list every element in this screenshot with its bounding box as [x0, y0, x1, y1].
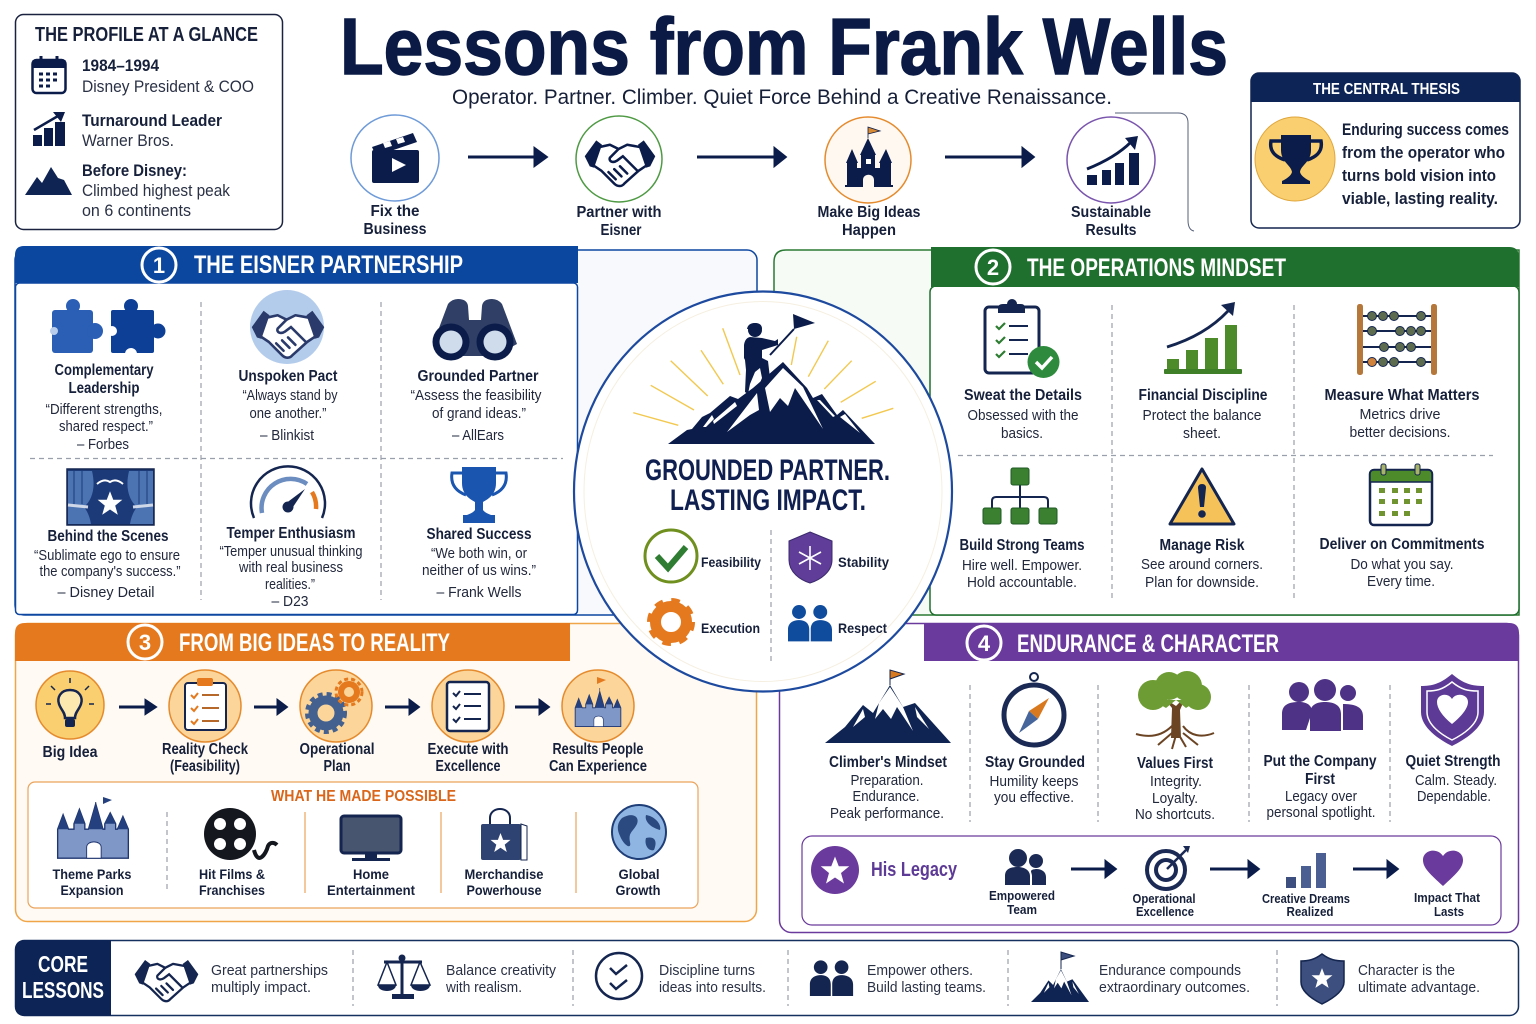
item: temper enthusiasm: with real business: [238, 560, 343, 576]
step: operational excellence: Operational: [1132, 892, 1196, 906]
value: stability: [789, 532, 889, 583]
item: put the company first: [1264, 679, 1377, 821]
item: behind the scenes: the company's success.”: [40, 564, 181, 580]
item: shared success: neither of us wins.”: [422, 563, 536, 579]
item: values first: Values First: [1137, 755, 1213, 772]
icon: film clapper: [351, 115, 439, 201]
panel 2: the operations mindset: [774, 247, 1519, 615]
item: manage risk: See around corners.: [1141, 557, 1263, 573]
item: sweat the details: Sweat the Details: [964, 387, 1082, 404]
item: manage risk: Manage Risk: [1160, 537, 1245, 554]
lesson: discipline: ideas into results.: [659, 979, 766, 996]
item: unspoken pact: – Blinkist: [260, 428, 314, 444]
heading: panel 4: ENDURANCE & CHARACTER: [1017, 630, 1279, 658]
lesson: partnerships: [135, 960, 328, 1001]
lesson: empower: Build lasting teams.: [867, 979, 986, 996]
lesson: character: Character is the: [1358, 962, 1455, 979]
icon: stage curtains: [67, 469, 154, 525]
item: complementary leadership: – Forbes: [77, 437, 129, 453]
step: big idea: Big Idea: [42, 744, 98, 761]
item: quiet strength: Dependable.: [1417, 789, 1491, 805]
text: turnaround: Turnaround Leader: [82, 111, 222, 130]
item: merchandise: Powerhouse: [466, 882, 542, 898]
item: home entertainment: Entertainment: [327, 882, 415, 898]
item: financial discipline: [1138, 387, 1268, 442]
value: respect: [788, 605, 887, 641]
icon: gauge: [251, 466, 325, 518]
lesson: endurance: Endurance compounds: [1099, 962, 1241, 979]
item: complementary leadership: “Different strengths,: [46, 402, 162, 418]
item: behind the scenes: Behind the Scenes: [48, 528, 168, 545]
lesson: discipline: [596, 953, 766, 999]
heading: profile: THE PROFILE AT A GLANCE: [35, 24, 258, 46]
heading: panel 1: [142, 248, 463, 282]
item: stay grounded: you effective.: [994, 790, 1074, 806]
item: hit films: Hit Films &: [199, 866, 265, 882]
item: values first: No shortcuts.: [1135, 807, 1215, 823]
arrow: [945, 149, 1033, 165]
item: build strong teams: Hold accountable.: [967, 575, 1077, 591]
arrow: [468, 149, 546, 165]
item: shared success: Shared Success: [426, 526, 532, 543]
band: core lessons: [15, 940, 1518, 1016]
step: operational plan: [300, 670, 374, 775]
step: execute with excellence: Execute with: [428, 741, 508, 758]
item: temper enthusiasm: Temper Enthusiasm: [226, 525, 356, 542]
item: measure what matters: Measure What Matters: [1324, 387, 1480, 404]
step: creative dreams realized: [1262, 853, 1350, 919]
text: before disney: Climbed highest peak: [82, 181, 230, 200]
item: unspoken pact: one another.”: [250, 406, 327, 422]
item: grounded partner: of grand ideas.”: [432, 406, 526, 422]
item: home entertainment: Home: [353, 866, 389, 882]
item: home entertainment: [327, 816, 415, 898]
item: merchandise: [464, 809, 544, 898]
panel 1: the Eisner partnership: [15, 246, 757, 615]
flow: four-step path: [351, 113, 1194, 239]
item: put the company first: Put the Company: [1264, 753, 1377, 770]
step: results people can experience: Results People: [552, 741, 644, 758]
text: thesis: from the operator who: [1342, 144, 1505, 162]
text: turnaround: Warner Bros.: [82, 131, 174, 150]
item: build strong teams: [960, 537, 1084, 591]
heading: grounded partner lasting impact: LASTING IMPACT.: [670, 484, 866, 517]
value: respect: Respect: [838, 620, 887, 636]
lesson: balance: Balance creativity: [446, 962, 556, 979]
center medallion: [574, 292, 952, 692]
lesson: endurance: [1031, 952, 1250, 1002]
label: make big ideas happen: [818, 204, 920, 239]
arrow: [515, 701, 548, 713]
item: global growth: Global: [618, 866, 660, 882]
item: measure what matters: Metrics drive: [1360, 407, 1440, 423]
item: theme parks: Theme Parks: [52, 866, 132, 882]
lesson: partnerships: multiply impact.: [211, 979, 311, 996]
item: behind the scenes: – Disney Detail: [58, 585, 154, 601]
icon: trophy: [1255, 117, 1335, 201]
icon: checklist clipboard: [985, 299, 1060, 378]
lesson: discipline: Discipline turns: [659, 962, 755, 979]
step: creative dreams realized: Realized: [1286, 905, 1334, 919]
panel 4: endurance and character: [780, 623, 1519, 932]
heading: panel 2: THE OPERATIONS MINDSET: [1027, 254, 1286, 282]
arrow: [697, 149, 785, 165]
arrow: [1210, 862, 1258, 876]
item: sweat the details: basics.: [1001, 426, 1043, 442]
heading: panel 2: [976, 250, 1286, 284]
value: execution: Execution: [701, 620, 760, 636]
icon: binoculars: [432, 299, 517, 360]
step: operational excellence: [1132, 846, 1196, 919]
text: before disney: on 6 continents: [82, 201, 191, 220]
heading: panel 3: FROM BIG IDEAS TO REALITY: [179, 629, 450, 657]
item: temper enthusiasm: “Temper unusual thinking: [220, 544, 362, 560]
panel: profile at a glance: [16, 14, 282, 230]
text: thesis: viable, lasting reality.: [1342, 190, 1498, 208]
step: impact that lasts: [1414, 851, 1481, 919]
arrow: [385, 701, 418, 713]
item: global growth: [612, 805, 666, 898]
icon: org chart: [983, 468, 1057, 524]
item: unspoken pact: [238, 368, 338, 444]
title: Lessons from Frank Wells: [340, 2, 1228, 91]
item: grounded partner: “Assess the feasibility: [410, 388, 542, 404]
item: climber's mindset: Peak performance.: [830, 806, 944, 822]
item: merchandise: Merchandise: [464, 866, 544, 882]
item: deliver on commitments: Do what you say.: [1350, 557, 1454, 573]
item: unspoken pact: “Always stand by: [242, 388, 338, 404]
item: behind the scenes: [34, 528, 181, 601]
lesson: partnerships: Great partnerships: [211, 962, 328, 979]
item: quiet strength: Quiet Strength: [1406, 753, 1500, 770]
heading: core lessons: [22, 951, 104, 1003]
item: climber's mindset: Climber's Mindset: [829, 754, 947, 771]
item: values first: [1135, 671, 1215, 823]
text: tenure: 1984–1994: [82, 56, 159, 75]
lesson: character: [1301, 954, 1480, 1004]
icon: warning triangle: [1170, 469, 1234, 524]
item: complementary leadership: [46, 362, 162, 453]
icon: puzzle: [50, 299, 166, 360]
heading: panel 1: 1: [153, 253, 165, 278]
step: reality check: (Feasibility): [170, 758, 240, 775]
text: tenure: Disney President & COO: [82, 77, 254, 96]
lesson: character: ultimate advantage.: [1358, 979, 1480, 996]
lesson: endurance: extraordinary outcomes.: [1099, 979, 1250, 996]
item: quiet strength: [1406, 674, 1500, 805]
step: reality check: Reality Check: [162, 741, 248, 758]
heading: central thesis: THE CENTRAL THESIS: [1313, 81, 1460, 98]
subtitle: Operator. Partner. Climber. Quiet Force Behind a Creative Renaissance.: [452, 86, 1112, 109]
item: stay grounded: Stay Grounded: [985, 754, 1085, 771]
item: temper enthusiasm: – D23: [272, 594, 308, 610]
label: partner with eisner: Eisner: [600, 222, 642, 239]
icon: calendar: [32, 56, 66, 93]
item: hit films: [199, 808, 277, 898]
item: build strong teams: Build Strong Teams: [960, 537, 1084, 554]
arrow: [254, 701, 286, 713]
item: theme parks: Expansion: [60, 882, 124, 898]
heading: his legacy: His Legacy: [871, 859, 958, 881]
icon: handshake circle: [250, 290, 324, 364]
step: impact that lasts: Lasts: [1434, 905, 1464, 919]
lesson: balance: with realism.: [445, 979, 522, 996]
arrow: [119, 701, 155, 713]
heading: panel 3: 3: [139, 630, 151, 655]
step: results people can experience: [549, 670, 647, 775]
heading: grounded partner lasting impact: GROUNDED PARTNER.: [645, 454, 890, 487]
item: financial discipline: sheet.: [1183, 426, 1221, 442]
item: theme parks: [52, 797, 132, 898]
label: fix the business: [364, 203, 426, 238]
step: empowered team: Empowered: [989, 889, 1055, 903]
item: values first: Integrity.: [1150, 774, 1202, 790]
item: put the company first: First: [1305, 771, 1335, 788]
label: fix the business: Business: [364, 221, 426, 238]
item: sweat the details: [964, 387, 1082, 442]
item: hit films: Franchises: [199, 882, 265, 898]
item: climber's mindset: [825, 670, 951, 822]
item: shared success: – Frank Wells: [436, 585, 522, 601]
step: operational plan: Plan: [324, 758, 350, 775]
item: put the company first: Legacy over: [1285, 789, 1357, 805]
item: complementary leadership: shared respect.”: [59, 419, 153, 435]
step: execute with excellence: [428, 670, 508, 775]
icon: legacy star: [811, 846, 859, 894]
item: grounded partner: Grounded Partner: [418, 368, 538, 385]
item: shared success: [422, 526, 536, 601]
label: fix the business: Fix the: [370, 203, 420, 220]
heading: panel 3: [128, 625, 450, 659]
step: reality check: [162, 670, 248, 775]
heading: core lessons: LESSONS: [22, 977, 104, 1003]
item: unspoken pact: Unspoken Pact: [238, 368, 338, 385]
step: creative dreams realized: Creative Dreams: [1262, 892, 1350, 906]
label: sustainable results: [1071, 204, 1151, 239]
heading: what he made possible: WHAT HE MADE POSSIBLE: [271, 788, 456, 805]
step: execute with excellence: Excellence: [436, 758, 501, 775]
text: before disney: Before Disney:: [82, 161, 187, 180]
text: tenure: [82, 56, 254, 96]
icon: blue trophy: [452, 467, 506, 523]
item: quiet strength: Calm. Steady.: [1415, 773, 1497, 789]
text: thesis: turns bold vision into: [1342, 167, 1496, 185]
panel 3: from big ideas to reality: [15, 623, 756, 922]
illustration: climber on summit: [668, 314, 875, 444]
label: sustainable results: Results: [1086, 222, 1136, 239]
step: operational plan: Operational: [300, 741, 374, 758]
item: shared success: “We both win, or: [431, 546, 527, 562]
text: thesis: [1342, 121, 1509, 208]
value: feasibility: Feasibility: [701, 554, 761, 570]
heading: panel 4: [967, 626, 1279, 660]
heading: panel 1: THE EISNER PARTNERSHIP: [194, 251, 463, 279]
icon: handshake: [576, 116, 662, 202]
label: make big ideas happen: Happen: [842, 222, 896, 239]
item: financial discipline: Financial Discipline: [1138, 387, 1268, 404]
item: climber's mindset: Endurance.: [852, 789, 920, 805]
item: grounded partner: [410, 368, 542, 444]
item: sweat the details: Obsessed with the: [968, 408, 1078, 424]
item: temper enthusiasm: realities.”: [265, 577, 315, 593]
icon: financial chart: [1164, 302, 1242, 374]
item: deliver on commitments: Deliver on Commitments: [1320, 536, 1484, 553]
heading: core lessons: CORE: [38, 951, 88, 977]
text: before disney: [82, 161, 230, 220]
panel: central thesis: [1251, 73, 1520, 228]
label: partner with eisner: Partner with: [576, 204, 662, 221]
item: build strong teams: Hire well. Empower.: [962, 558, 1082, 574]
lesson: empower: Empower others.: [867, 962, 973, 979]
step: empowered team: [989, 849, 1055, 917]
icon: rising results: [1067, 117, 1155, 203]
text: thesis: Enduring success comes: [1342, 121, 1509, 139]
item: stay grounded: [985, 673, 1085, 806]
icon: castle: [825, 117, 911, 203]
icon: abacus: [1357, 304, 1437, 375]
item: deliver on commitments: [1320, 536, 1484, 590]
item: complementary leadership: Leadership: [68, 380, 140, 397]
step: results people can experience: Can Experience: [549, 758, 647, 775]
item: grounded partner: – AllEars: [452, 428, 504, 444]
heading: panel 2: 2: [987, 255, 999, 280]
item: deliver on commitments: Every time.: [1367, 574, 1435, 590]
item: values first: Loyalty.: [1152, 791, 1198, 807]
item: complementary leadership: Complementary: [54, 362, 154, 379]
icon: mountain: [25, 167, 72, 195]
text: turnaround: [82, 111, 222, 150]
step: big idea: [36, 671, 104, 761]
item: manage risk: [1141, 537, 1263, 591]
value: feasibility: [645, 530, 761, 582]
step: impact that lasts: Impact That: [1414, 891, 1481, 905]
item: temper enthusiasm: [220, 525, 362, 610]
item: manage risk: Plan for downside.: [1145, 575, 1259, 591]
heading: grounded partner lasting impact: [645, 454, 890, 517]
item: put the company first: personal spotlight.: [1266, 805, 1376, 821]
sun rays: [633, 328, 893, 425]
icon: green calendar: [1370, 464, 1432, 525]
item: financial discipline: Protect the balance: [1142, 408, 1262, 424]
panel: his legacy: [802, 836, 1501, 925]
step: operational excellence: Excellence: [1136, 905, 1194, 919]
icon: growth chart: [33, 112, 65, 146]
arrow: [1353, 862, 1397, 876]
item: measure what matters: better decisions.: [1350, 425, 1450, 441]
label: sustainable results: Sustainable: [1071, 204, 1151, 221]
label: partner with eisner: [576, 204, 662, 239]
label: make big ideas happen: Make Big Ideas: [818, 204, 920, 221]
panel: what he made possible: [28, 782, 698, 908]
item: global growth: Growth: [616, 882, 660, 898]
value: execution: [650, 600, 760, 644]
value: stability: Stability: [838, 554, 889, 570]
lesson: empower: [810, 960, 986, 996]
item: behind the scenes: “Sublimate ego to ensure: [34, 548, 180, 564]
heading: panel 4: 4: [978, 631, 991, 656]
lesson: balance: [378, 954, 556, 999]
step: empowered team: Team: [1007, 903, 1037, 917]
item: stay grounded: Humility keeps: [990, 774, 1078, 790]
item: climber's mindset: Preparation.: [850, 773, 924, 789]
item: measure what matters: [1324, 387, 1480, 441]
arrow: [1071, 862, 1115, 876]
